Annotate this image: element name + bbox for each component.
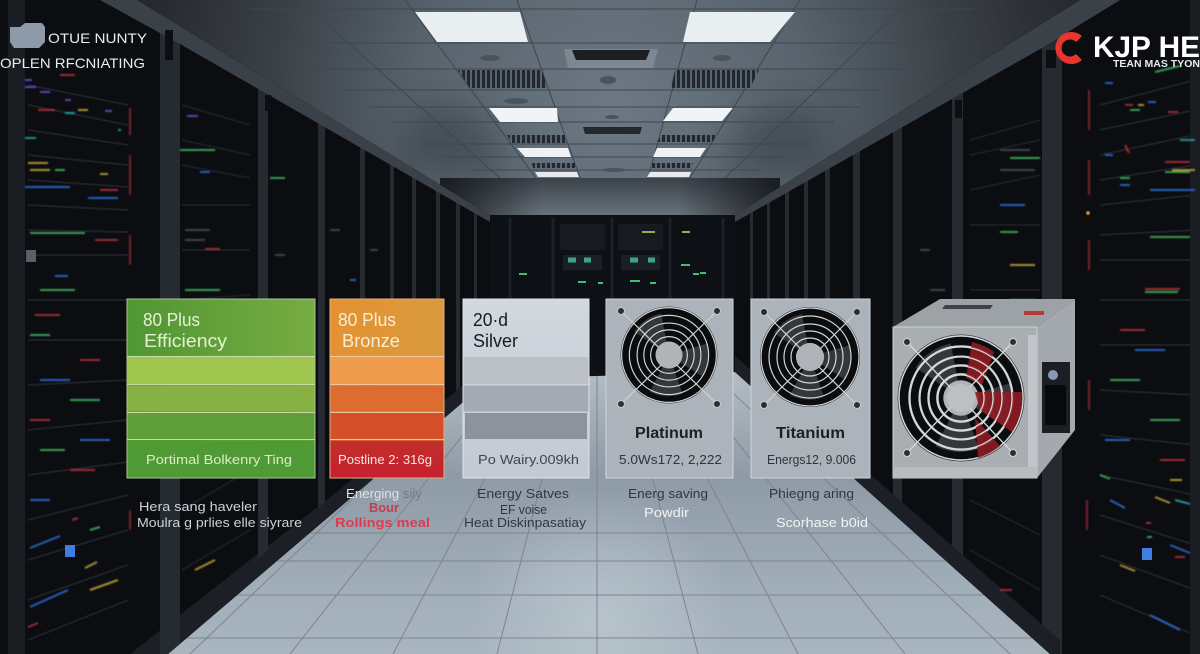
fan guard rings	[910, 347, 1012, 449]
heading line 2: Efficiency	[144, 331, 227, 351]
led lights	[25, 75, 378, 627]
icon: camera badge	[10, 23, 45, 48]
fan guard spokes and screws	[904, 338, 1016, 456]
fan guard spokes and screws	[618, 308, 720, 408]
panel rating: Portimal Bolkenry Ting	[146, 452, 292, 467]
panel rating: Postline 2: 316g	[338, 452, 432, 467]
panel rating: Po Wairy.009kh	[478, 452, 579, 467]
caption: platinum: Energ saving	[628, 486, 708, 501]
top-left logo	[0, 23, 148, 71]
panel: Titanium	[751, 299, 870, 478]
caption: efficiency	[137, 499, 302, 530]
logo text line 2: OPLEN RFCNIATING	[0, 55, 145, 71]
caption: bronze: Energing sily	[346, 486, 423, 501]
caption: titanium	[769, 486, 868, 530]
fan guard spokes and screws	[760, 308, 860, 408]
PSU front	[893, 327, 1037, 478]
red fan blades	[966, 342, 1022, 458]
shelves	[1100, 80, 1195, 635]
brand name: KJP HE	[1093, 31, 1200, 64]
back wall racks	[490, 215, 735, 380]
icon: large fan	[898, 335, 1024, 461]
panel: Silver	[463, 299, 589, 478]
heading line 2: Bronze	[342, 331, 400, 351]
caption: efficiency: Hera sang haveler	[139, 499, 258, 514]
caption: titanium: Phiegng aring	[769, 486, 854, 501]
heading line 2: Silver	[473, 331, 518, 351]
panel: Platinum	[606, 299, 733, 478]
caption: platinum	[628, 486, 708, 520]
floor	[168, 372, 1050, 654]
heading: 80 Plus	[338, 310, 396, 330]
caption: bronze: Bour	[369, 500, 399, 515]
heading: Platinum	[635, 425, 703, 442]
caption: silver: Heat Diskinpasatiay	[464, 515, 587, 530]
posts	[8, 0, 25, 654]
posts	[750, 0, 1062, 654]
top beam	[100, 0, 490, 222]
caption: silver: EF voise	[500, 502, 547, 517]
caption: bronze: Rollings meal	[335, 515, 430, 530]
brand tagline: TEAN MAS TYON	[1113, 59, 1200, 70]
top-right logo	[1055, 31, 1200, 70]
right wall racks	[730, 0, 1200, 654]
shelves	[28, 85, 128, 640]
caption: bronze	[335, 486, 430, 530]
door bottoms	[170, 386, 462, 653]
caption: efficiency: Moulra g prlies elle siyrare	[137, 515, 302, 530]
heading: Titanium	[776, 425, 845, 442]
logo text line 1: OTUE NUNTY	[48, 30, 148, 46]
panel: 80 Plus Efficiency	[127, 299, 315, 478]
icon: fan	[760, 307, 860, 407]
power socket	[1042, 362, 1070, 433]
icon: red C mark	[1055, 32, 1082, 64]
heading: 80 Plus	[143, 310, 200, 330]
icon: fan	[621, 307, 717, 403]
ceiling	[120, 0, 1095, 215]
panel rating: 5.0Ws172, 2,222	[619, 452, 722, 467]
PSU side	[1037, 299, 1075, 478]
back wall band	[440, 178, 780, 215]
left wall racks	[0, 0, 495, 654]
caption: platinum: Powdir	[644, 505, 690, 520]
panel: 80 Plus Bronze	[330, 299, 444, 478]
panel rating: Energs12, 9.006	[767, 452, 856, 467]
caption: titanium: Scorhase b0id	[776, 515, 868, 530]
top beam	[735, 0, 1120, 222]
heading: 20·d	[473, 310, 508, 330]
led lights	[920, 66, 1195, 630]
caption: silver	[464, 486, 587, 530]
caption: silver: Energy Satves	[477, 486, 570, 501]
plinth	[130, 495, 333, 654]
PSU top	[893, 299, 1075, 327]
power supply unit illustration	[893, 299, 1075, 478]
door bottoms	[735, 356, 1060, 654]
